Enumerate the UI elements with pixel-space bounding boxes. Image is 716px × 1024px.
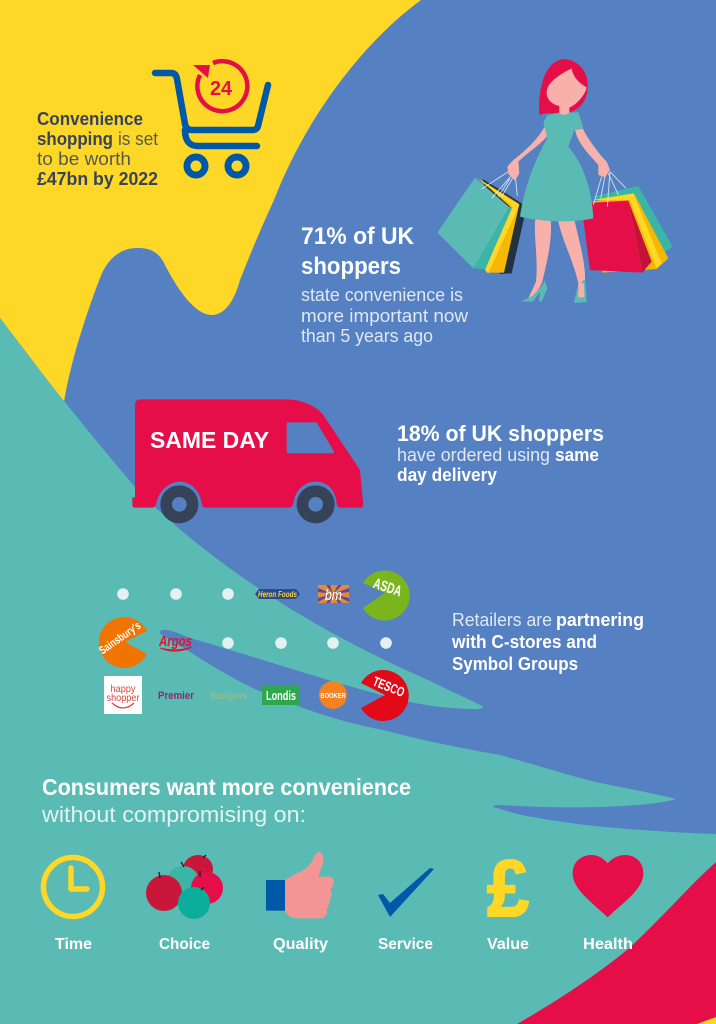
text: 18% of UK shoppers: 18% of UK shoppers	[397, 421, 604, 446]
text: convenience shopping: £47bn by 2022	[37, 169, 158, 189]
icon: clock	[44, 858, 102, 916]
text: 71% of UK shoppers: 71% of UK	[301, 223, 415, 250]
icon: heart	[573, 855, 643, 917]
icon: same day delivery van	[132, 399, 363, 523]
left bags	[437, 178, 524, 274]
text: 71% of UK shoppers: than 5 years ago	[301, 326, 433, 346]
label: Choice: Choice	[159, 936, 210, 953]
text: retailers partnering: with C-stores and	[451, 632, 597, 652]
van body	[132, 399, 363, 523]
retailer logo pacman graphic	[97, 570, 410, 721]
text: retailers partnering: partnering	[556, 610, 644, 630]
logo: Sainsbury's pacman: Sainsbury's	[97, 620, 143, 657]
label: Service: Service	[378, 936, 433, 953]
logo: B&M: bm	[325, 587, 342, 604]
text: convenience shopping: is set	[118, 129, 158, 149]
background: yellow wave	[0, 0, 421, 402]
logo: Londis	[262, 686, 300, 705]
logo: Tesco pacman: TESCO	[371, 674, 407, 700]
head and neck	[547, 68, 587, 117]
hair	[539, 59, 588, 115]
text: 18% of UK shoppers: same	[555, 445, 599, 465]
background: yellow corner	[697, 1017, 716, 1024]
text: retailers partnering: Retailers are	[452, 610, 552, 630]
text: retailers partnering: Symbol Groups	[452, 654, 578, 674]
text: 71% of UK shoppers: state convenience is	[301, 285, 463, 305]
text: convenience shopping: Convenience	[37, 109, 143, 129]
shoes	[523, 280, 587, 303]
icon: check mark	[378, 868, 434, 917]
cart wheels	[187, 157, 246, 175]
logo: Happy Shopper: shopper	[106, 692, 140, 704]
text: convenience shopping: to be worth	[37, 149, 131, 169]
24 label: 24	[210, 78, 233, 100]
logo: B&M	[318, 585, 349, 604]
text: retailers partnering	[451, 610, 644, 674]
logo: Booker	[319, 681, 347, 709]
icon: pound sign: £	[487, 844, 529, 933]
label: Health: Health	[583, 936, 633, 953]
icon: shopping cart with 24 hour clock	[155, 61, 268, 175]
logo: Sainsbury's pacman	[97, 617, 147, 668]
logo: Tesco pacman	[361, 670, 409, 721]
illustration: woman with shopping bags	[437, 59, 673, 303]
logo: Premier: Premier	[158, 690, 195, 702]
icon: apples	[146, 855, 223, 919]
background: red corner	[517, 862, 716, 1024]
text: 71% of UK shoppers	[301, 223, 469, 346]
text: convenience shopping: shopping	[37, 129, 113, 149]
background: teal wave	[0, 318, 716, 1024]
icon: thumbs up	[266, 852, 334, 918]
label: Time: Time	[55, 936, 92, 953]
bag handles	[482, 172, 626, 207]
text: 71% of UK shoppers: more important now	[301, 306, 469, 326]
label: Value: Value	[487, 936, 529, 953]
24 hour arrow	[193, 61, 247, 111]
logo: Happy Shopper	[104, 676, 142, 714]
text: convenience shopping	[37, 109, 158, 189]
logo: Budgens: Budgens	[210, 691, 247, 702]
logo: Londis: Londis	[266, 689, 296, 703]
right bags	[583, 186, 673, 273]
text: 18% of UK shoppers	[397, 421, 604, 485]
trail dots	[117, 588, 392, 649]
van label: SAME DAY	[150, 427, 269, 453]
legs	[528, 218, 586, 298]
text: 71% of UK shoppers: shoppers	[301, 253, 401, 280]
logo: Heron Foods: Heron Foods	[258, 590, 297, 599]
cart frame	[155, 73, 268, 146]
logo: Asda pacman	[363, 570, 410, 620]
label: Quality: Quality	[273, 936, 328, 953]
heading: consumers want more convenience: Consumers want more convenience	[42, 774, 411, 800]
arms	[507, 126, 610, 181]
text: 18% of UK shoppers: have ordered using	[397, 445, 550, 465]
heading: consumers want more convenience	[41, 774, 411, 827]
logo: Booker: BOOKER	[320, 691, 346, 700]
text: 18% of UK shoppers: day delivery	[397, 465, 497, 485]
logo: Happy Shopper: happy	[110, 683, 136, 695]
logo: Asda pacman: ASDA	[371, 575, 404, 600]
dress	[520, 112, 593, 221]
heading: consumers want more convenience: without compromising on:	[41, 802, 306, 827]
logo: Argos: Argos	[158, 633, 192, 650]
